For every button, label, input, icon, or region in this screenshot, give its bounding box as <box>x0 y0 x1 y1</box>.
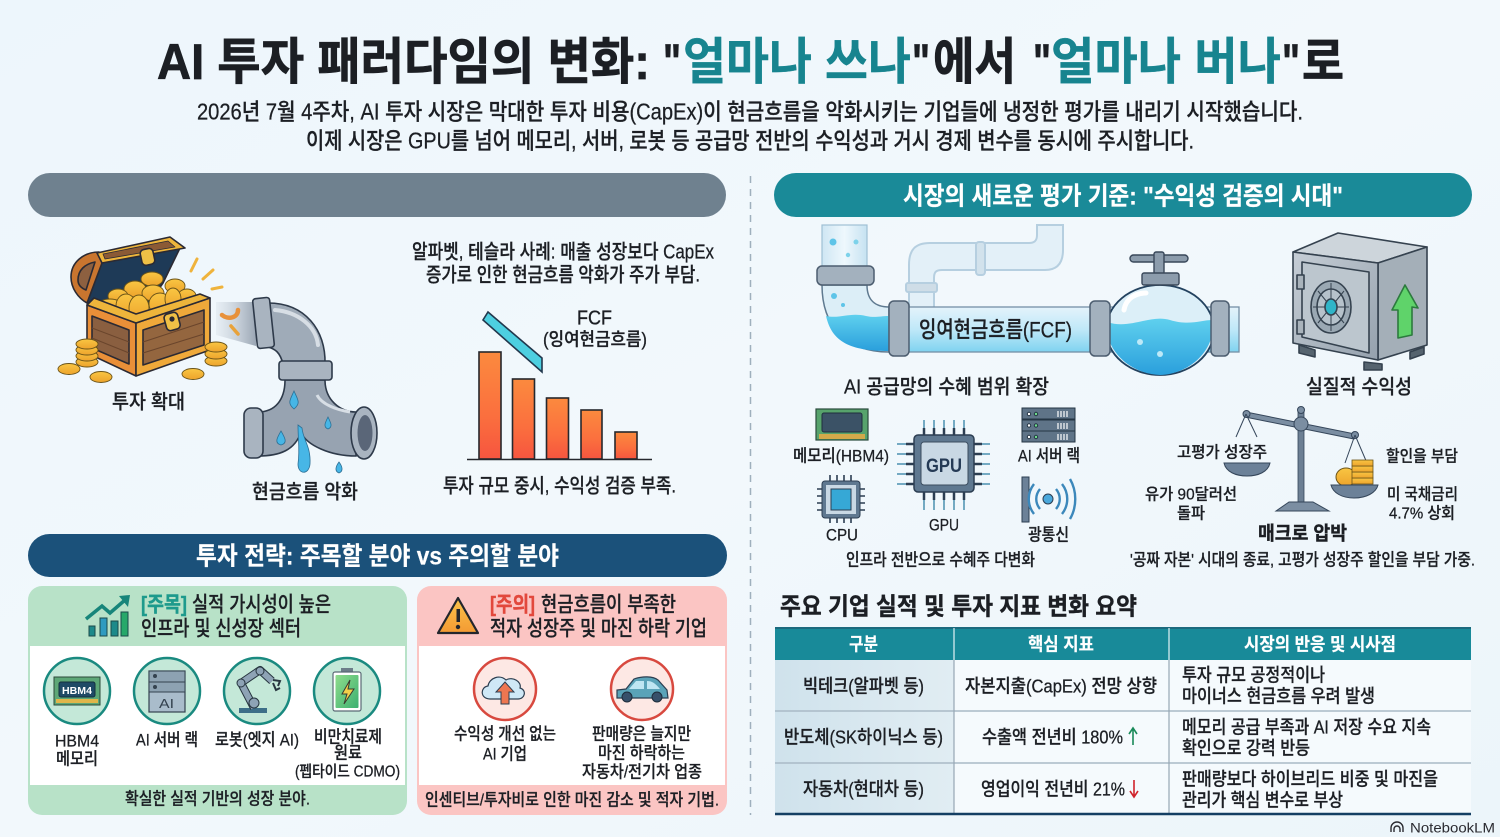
icon: AI server rack <box>134 658 200 724</box>
title: AI 투자 패러다임의 변화: <box>157 34 650 90</box>
label: GPU: GPU <box>929 516 959 535</box>
caption: caution: 인센티브/투자비로 인한 마진 감소 및 적자 기법. <box>425 791 719 810</box>
text: scale focus caption: 투자 규모 중시, 수익성 검증 부족. <box>443 475 676 498</box>
labels: caution sectors: 수익성 개선 없는 <box>454 725 556 744</box>
illustration: FCF water pipeline: 잉여현금흐름(FCF) <box>919 318 1072 343</box>
table header row: 핵심 지표 <box>1028 635 1094 655</box>
table row: semiconductors: 메모리 공급 부족과 AI 저장 수요 지속 <box>1182 717 1431 738</box>
panel: caution sectors <box>417 586 727 815</box>
labels: focus sectors: AI 서버 랙 <box>136 731 198 750</box>
caption: focus: 확실한 실적 기반의 성장 분야. <box>125 790 310 809</box>
label: memory: 메모리(HBM4) <box>793 447 889 466</box>
heading: table title: 주요 기업 실적 및 투자 지표 변화 요약 <box>780 594 1137 621</box>
icon: HBM4 memory <box>44 658 110 724</box>
title: " <box>912 34 930 90</box>
panel header: strategy: 투자 전략: 주목할 분야 vs 주의할 분야 <box>196 543 559 571</box>
icon: cloud upload <box>474 658 536 720</box>
title: " <box>1033 34 1051 90</box>
labels: macro pressure factors: 4.7% 상회 <box>1389 505 1455 523</box>
icon: battery <box>314 658 380 724</box>
heading: focus: 인프라 및 신성장 섹터 <box>141 618 301 641</box>
title: " <box>1282 34 1300 90</box>
table header row: 구분 <box>849 635 878 655</box>
subtitle text: 이제 시장은 GPU를 넘어 메모리, 서버, 로봇 등 공급망 전반의 수익성과 거시 경제 변수를 동시에 주시합니다. <box>306 128 1194 154</box>
table row: big tech: 자본지출(CapEx) 전망 상향 <box>965 676 1157 697</box>
icon: treasure chest <box>58 237 227 382</box>
table row: big tech <box>803 665 1375 707</box>
label: investment expansion: 투자 확대 <box>112 391 185 414</box>
table row: semiconductors <box>784 717 1431 759</box>
table: company summary <box>775 627 1471 814</box>
heading: supply chain: AI 공급망의 수혜 범위 확장 <box>844 376 1049 399</box>
labels: focus sectors: HBM4 <box>55 732 99 751</box>
text: Alphabet Tesla case: 증가로 인한 현금흐름 악화가 주가 부담. <box>426 264 700 287</box>
panel header: right: 시장의 새로운 평가 기준: "수익성 검증의 시대" <box>903 183 1343 211</box>
heading: caution: 현금흐름이 부족한 <box>541 594 676 617</box>
label: FCF: FCF <box>577 308 612 330</box>
label: optical: 광통신 <box>1028 526 1069 545</box>
icon: optical communication <box>1022 477 1075 522</box>
heading: caution: 적자 성장주 및 마진 하락 기업 <box>490 618 707 641</box>
table row: autos: 영업이익 전년비 21% <box>981 779 1125 800</box>
subtitle text <box>197 99 1303 154</box>
bar chart: declining FCF <box>467 312 652 460</box>
icon: memory chip <box>816 409 868 440</box>
icon: server rack <box>1022 408 1075 442</box>
subtitle text: 2026년 7월 4주차, AI 투자 시장은 막대한 투자 비용(CapEx)이 현금흐름을 악화시키는 기업들에 냉정한 평가를 내리기 시작했습니다. <box>197 99 1303 125</box>
illustration: FCF water pipeline <box>817 225 1239 375</box>
text: Alphabet Tesla case: 알파벳, 테슬라 사례: 매출 성장보다 CapEx <box>412 241 714 264</box>
table row: big tech: 마이너스 현금흐름 우려 발생 <box>1182 686 1375 707</box>
icon: AI server rack: AI <box>159 696 174 711</box>
title <box>157 34 1344 90</box>
labels: caution sectors: 마진 하락하는 <box>598 744 685 763</box>
panel header: left (blank slate pill) <box>28 173 726 217</box>
labels: macro pressure factors <box>1145 444 1458 523</box>
icon: rising chart <box>86 595 130 636</box>
heading: caution: [주의] <box>490 594 535 617</box>
table row: autos: 관리가 핵심 변수로 부상 <box>1182 790 1343 811</box>
label: FCF: (잉여현금흐름) <box>543 330 647 350</box>
title: " <box>663 34 681 90</box>
labels: caution sectors: AI 기업 <box>483 745 527 764</box>
label: FCF <box>543 308 647 350</box>
table header row <box>849 635 1396 655</box>
title: 로 <box>1302 34 1344 90</box>
heading: focus <box>141 594 331 641</box>
labels: macro pressure factors: 고평가 성장주 <box>1177 444 1267 462</box>
panel header: strategy <box>28 534 727 577</box>
labels: caution sectors: 판매량은 늘지만 <box>592 725 691 744</box>
icon: warning triangle <box>438 598 478 633</box>
heading: caution <box>490 594 707 641</box>
label: cash flow deterioration: 현금흐름 악화 <box>252 481 358 504</box>
labels: focus sectors <box>55 728 400 781</box>
table row: autos: 자동차(현대차 등) <box>803 779 924 800</box>
labels: macro pressure factors: 할인을 부담 <box>1386 448 1458 466</box>
table row: semiconductors: 수출액 전년비 180% <box>982 727 1123 748</box>
icon: GPU chip <box>897 420 990 510</box>
labels: macro pressure factors: 미 국채금리 <box>1387 486 1458 504</box>
heading: focus: [주목] <box>141 594 187 617</box>
table row: semiconductors: 확인으로 강력 반등 <box>1182 738 1310 759</box>
table header row: 시장의 반응 및 시사점 <box>1244 635 1396 655</box>
icon: CPU chip <box>817 475 865 523</box>
heading: focus: 실적 가시성이 높은 <box>192 594 331 617</box>
watermark: NotebookLM: NotebookLM <box>1410 820 1495 836</box>
table row: autos <box>803 769 1438 811</box>
table row: autos: 판매량보다 하이브리드 비중 및 마진을 <box>1182 769 1438 790</box>
icon: GPU chip: GPU <box>926 456 962 477</box>
icon: robot arm <box>224 658 290 724</box>
labels: caution sectors <box>454 725 702 782</box>
label: CPU: CPU <box>826 526 858 545</box>
icon: HBM4 memory: HBM4 <box>62 685 92 697</box>
icon: balance scale <box>1224 406 1378 511</box>
panel: watch sectors <box>28 586 407 815</box>
panel header: right <box>774 173 1472 217</box>
text: Alphabet Tesla case <box>412 241 714 287</box>
labels: macro pressure factors: 유가 90달러선 <box>1145 486 1237 504</box>
table row: semiconductors: 반도체(SK하이닉스 등) <box>784 727 943 748</box>
heading: macro pressure: 매크로 압박 <box>1258 523 1347 545</box>
labels: focus sectors: 메모리 <box>56 750 98 769</box>
labels: caution sectors: 자동차/전기차 업종 <box>582 763 702 782</box>
labels: focus sectors: 로봇(엣지 AI) <box>215 731 299 750</box>
title: 에서 <box>933 34 1016 90</box>
icon: safe with up arrow <box>1293 233 1427 370</box>
table row: big tech: 빅테크(알파벳 등) <box>803 676 924 697</box>
labels: focus sectors: 비만치료제 <box>314 728 382 747</box>
labels: focus sectors: (펩타이드 CDMO) <box>295 763 400 781</box>
labels: macro pressure factors: 돌파 <box>1177 505 1205 523</box>
icon: leaking grey pipe <box>216 297 377 473</box>
label: AI server rack: AI 서버 랙 <box>1018 447 1080 466</box>
title: 얼마나 버나 <box>1051 34 1281 90</box>
table row: big tech: 투자 규모 공정적이나 <box>1182 665 1325 686</box>
icon: car <box>611 658 673 720</box>
caption: infrastructure: 인프라 전반으로 수혜주 다변화 <box>846 551 1035 570</box>
title: 얼마나 쓰나 <box>683 34 911 90</box>
heading: real profitability: 실질적 수익성 <box>1306 376 1412 399</box>
labels: focus sectors: 원료 <box>334 744 362 763</box>
